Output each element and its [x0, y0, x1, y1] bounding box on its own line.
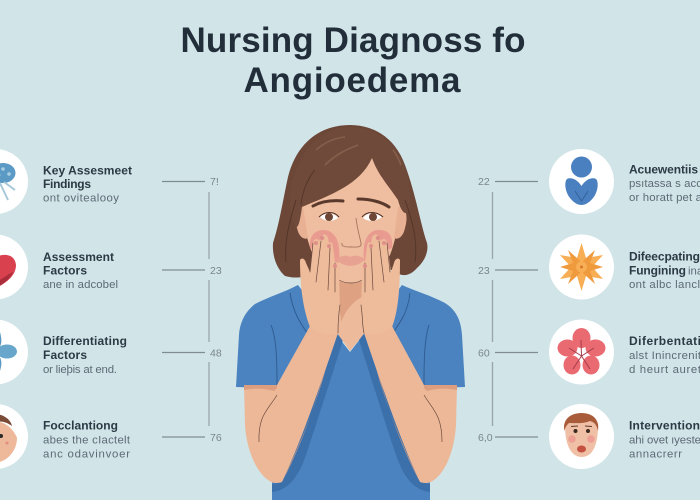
hair highlights: [316, 137, 401, 165]
text: differentiating factors: [43, 334, 127, 376]
text: assessment factors: [43, 250, 118, 291]
text: foccianting: [43, 418, 131, 460]
icon: blue flower: [0, 320, 28, 384]
finger lines: [310, 241, 390, 333]
text: foccianting: Focclantiong: [43, 418, 118, 432]
text: difeecpating fungining: ont albc lancl: [629, 279, 700, 291]
text: differentiating factors: Factors: [43, 348, 87, 362]
central figure: woman holding swollen face: [236, 125, 465, 500]
shirt: [236, 285, 465, 500]
text: foccianting: abes the cIactelt: [43, 434, 131, 446]
text: foccianting: anc odavinvoer: [43, 448, 130, 460]
icon: face: [549, 404, 614, 469]
left numbers: 7!: [210, 176, 219, 188]
text: acuewentiis: psıtassa s acc: [629, 178, 700, 190]
left item 1: key assessment findings: [0, 149, 132, 214]
text: key assessment findings: Key Assesmeet: [43, 164, 132, 178]
left arm: [244, 326, 338, 483]
text: differentiation: [629, 334, 700, 376]
right connector scale: [478, 176, 538, 444]
right item 4: intervention: [549, 404, 700, 469]
left hand: [300, 234, 340, 334]
text: intervention: ahi ovet ıyeste: [629, 434, 700, 446]
text: assessment factors: Factors: [43, 264, 87, 278]
left numbers: 76: [210, 432, 222, 444]
mouth: [336, 256, 365, 266]
hair front: [290, 127, 410, 227]
text: intervention: Intervention: [629, 418, 700, 432]
right numbers: 22: [478, 176, 490, 188]
right numbers: 23: [478, 265, 490, 277]
text: assessment factors: ane in adcobel: [43, 279, 118, 291]
left numbers: [210, 176, 222, 444]
left numbers: 48: [210, 348, 222, 360]
face: [301, 145, 401, 283]
text: differentiating factors: or lieþis at end.: [43, 364, 117, 376]
right item 1: acuewentiis: [549, 149, 700, 214]
icon: red heart: [0, 234, 28, 300]
text: differentiation: alst Inincrenit: [629, 350, 700, 362]
text: differentiating factors: Differentiating: [43, 334, 127, 348]
swollen cheeks: [310, 230, 392, 264]
title: Nursing Diagnoss fo: [180, 21, 526, 60]
nose: [342, 218, 361, 247]
left connector scale: [162, 176, 222, 444]
icon: blue microbe: [0, 149, 28, 214]
text: acuewentiis: Acuewentiis: [629, 162, 698, 176]
left item 4: foccianting: [0, 404, 131, 469]
right numbers: [478, 176, 493, 444]
right item 3: differentiation: [549, 320, 700, 384]
text: difeecpating fungining: Difeecpating: [629, 250, 700, 264]
shirt shadows: [272, 333, 430, 492]
left item 2: assessment factors: [0, 234, 118, 300]
neck: [335, 270, 367, 351]
shirt fold lines: [271, 293, 429, 385]
chin line: [339, 280, 362, 283]
text: assessment factors: Assessment: [43, 250, 114, 264]
text: acuewentiis: or horatt pet a: [629, 192, 700, 204]
eyes: [319, 212, 383, 221]
right arm: [364, 326, 457, 483]
arm details: [244, 368, 457, 482]
right item 2: difeecpating fungining: [549, 234, 700, 300]
text: intervention: annacrerr: [629, 448, 682, 460]
text: difeecpating fungining: Fungining: [629, 264, 686, 278]
text: key assessment findings: Findings: [43, 177, 91, 191]
text: intervention: [629, 418, 700, 460]
left item 3: differentiating factors: [0, 320, 127, 384]
right numbers: 60: [478, 348, 490, 360]
eyebrows: [313, 199, 389, 207]
title: [180, 21, 526, 100]
neck shadow: [337, 280, 364, 322]
right numbers: 6,0: [478, 432, 493, 444]
text: differentiation: d heurt auret: [629, 364, 700, 376]
left numbers: 23: [210, 265, 222, 277]
text: acuewentiis: [629, 162, 700, 204]
text: differentiation: Diferbentati: [629, 334, 700, 348]
ears: [295, 207, 407, 239]
text: key assessment findings: ont ovitealooy: [43, 192, 119, 204]
hair back: [273, 125, 427, 278]
nails: [314, 236, 386, 268]
icon: face: [0, 404, 28, 469]
icon: blue person with heart: [549, 149, 614, 214]
right hand: [361, 234, 400, 334]
icon: orange flower: [549, 234, 614, 300]
text: difeecpating fungining: [629, 250, 700, 291]
title: Angioedema: [244, 61, 461, 100]
left side hair strands: [286, 170, 416, 262]
text: key assessment findings: [43, 164, 132, 204]
icon: pink flower: [549, 320, 614, 384]
